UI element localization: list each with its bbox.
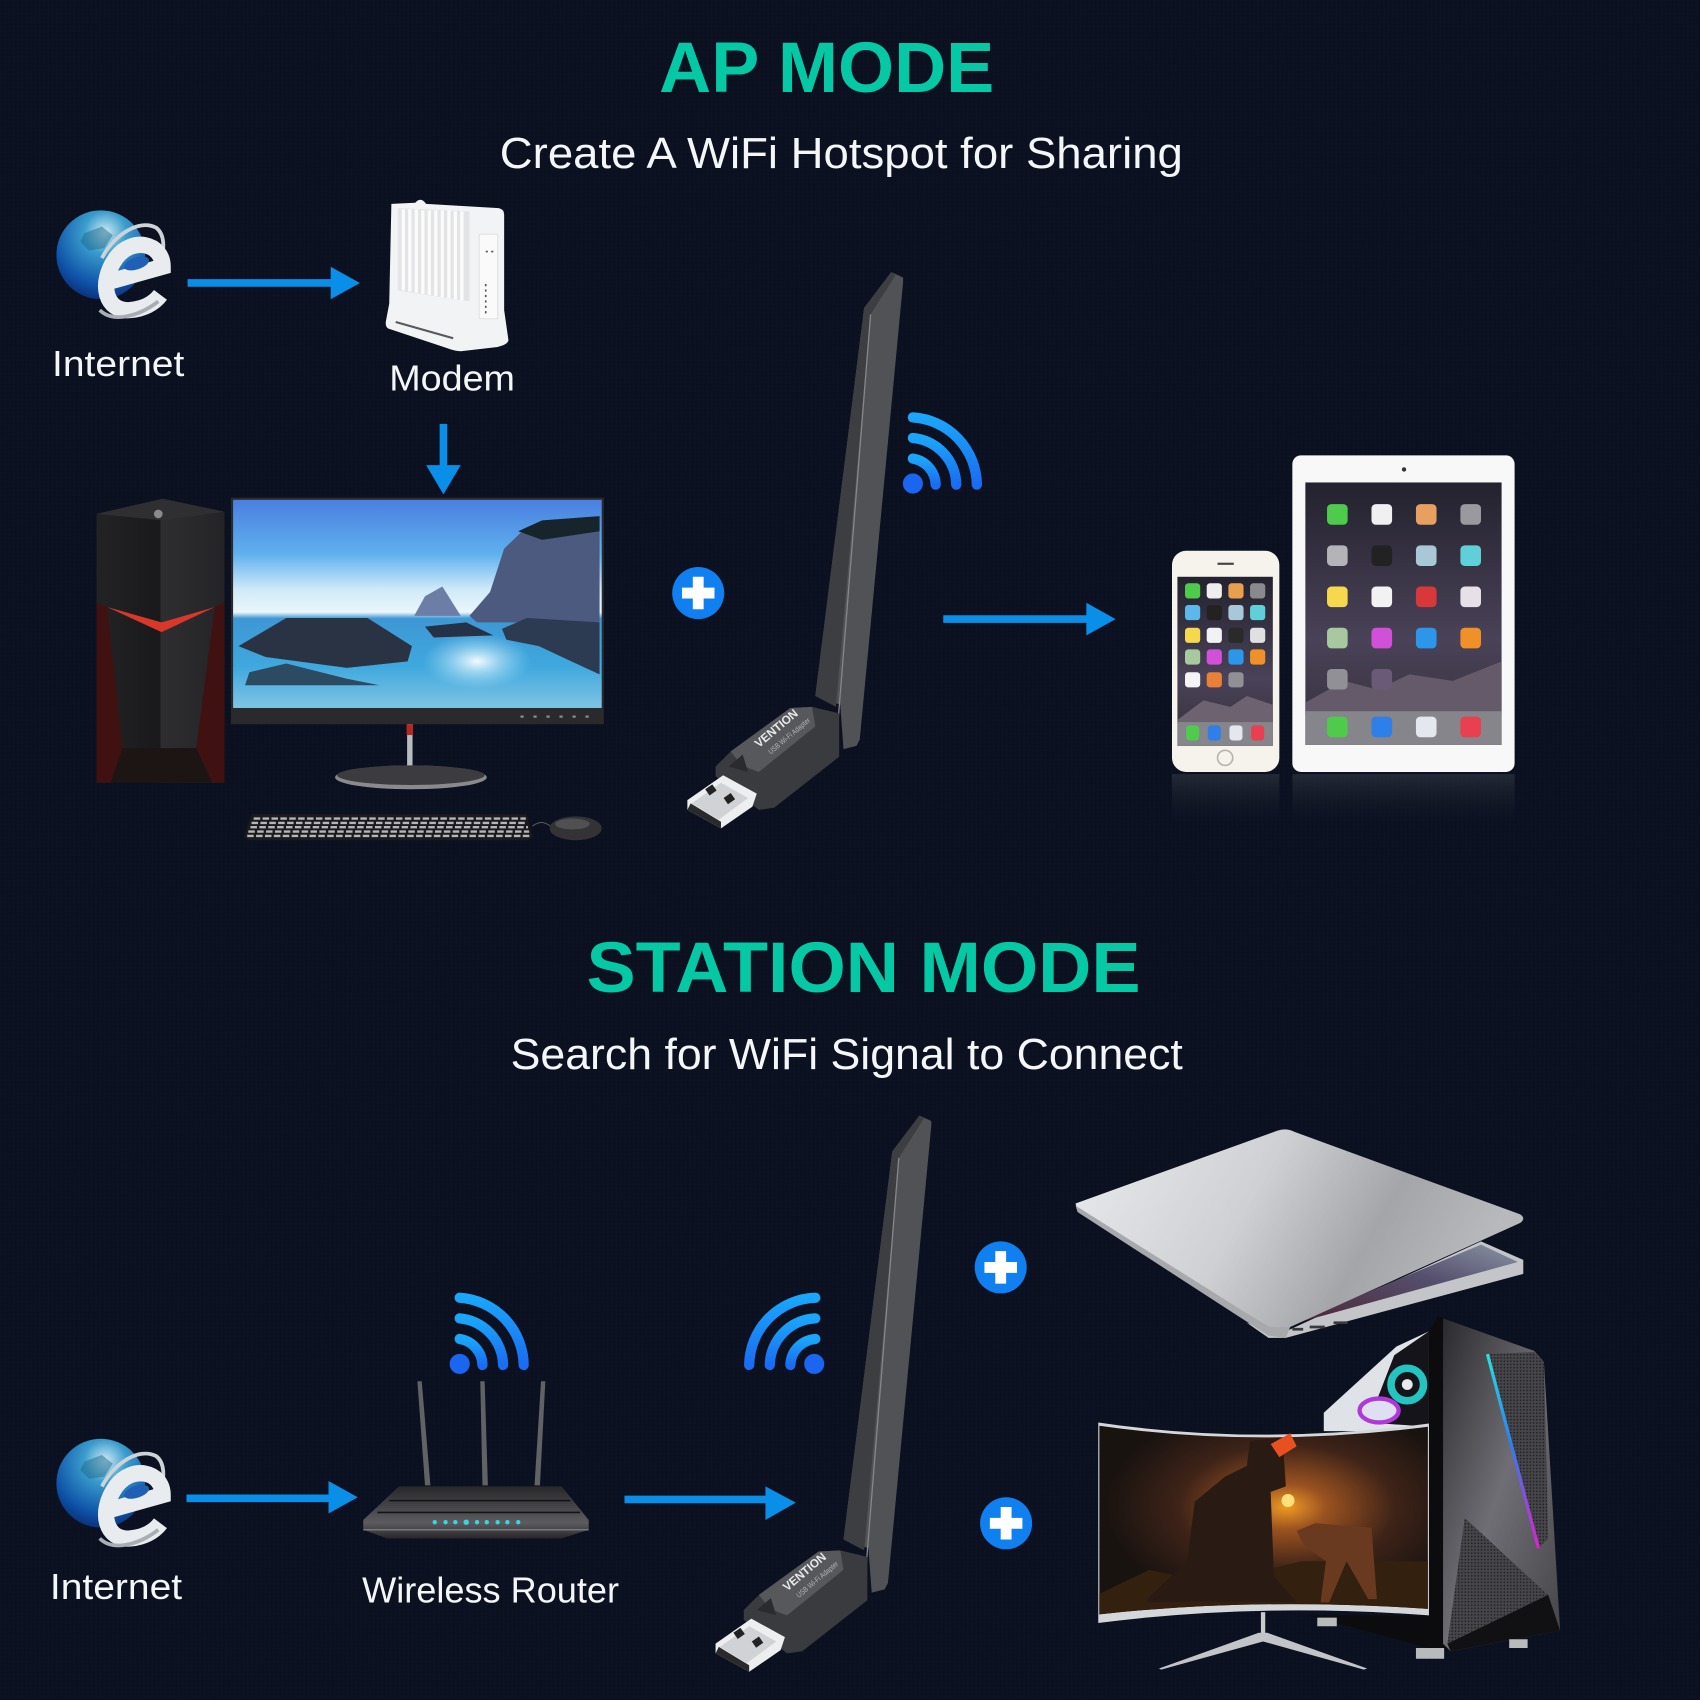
label: internet: Internet bbox=[50, 1567, 182, 1607]
rgb strip bbox=[1488, 1354, 1538, 1548]
label: internet: Internet bbox=[52, 344, 184, 384]
brand text: VENTION bbox=[752, 706, 801, 750]
dongle body bbox=[744, 1550, 867, 1653]
arrow: adapter to devices bbox=[943, 603, 1116, 635]
icon: wifi signal to adapter bbox=[749, 1298, 819, 1369]
icon: plus bbox=[672, 567, 724, 619]
front strip bbox=[1308, 1316, 1451, 1651]
arrow: modem to monitor bbox=[426, 424, 461, 494]
icon: wifi signal from router bbox=[455, 1298, 524, 1369]
icon: wireless router bbox=[363, 1381, 589, 1538]
icon: USB WiFi adapter: USB Wi-Fi Adapter bbox=[766, 716, 812, 756]
arrow: router to adapter bbox=[624, 1486, 796, 1520]
icon: plus lower bbox=[980, 1497, 1032, 1549]
title: AP mode: AP MODE bbox=[659, 28, 994, 108]
brand text: VENTION bbox=[780, 1550, 829, 1594]
icon: plus upper bbox=[975, 1241, 1027, 1293]
icon: keyboard bbox=[244, 814, 532, 840]
arrow: internet to router bbox=[186, 1481, 358, 1514]
USB plug bbox=[716, 1619, 785, 1672]
panel: station mode bbox=[50, 928, 1560, 1672]
USB plug bbox=[687, 775, 757, 828]
icon: PC tower bbox=[96, 499, 224, 783]
label: modem: Modem bbox=[389, 358, 515, 398]
antenna bbox=[815, 272, 903, 749]
icon: monitor stand bbox=[335, 724, 487, 789]
reflections bbox=[1172, 774, 1515, 826]
panel: AP mode bbox=[52, 28, 1515, 840]
arrow: internet to modem bbox=[188, 267, 360, 299]
bottom mesh bbox=[1447, 1518, 1548, 1644]
icon: USB WiFi adapter bbox=[716, 1116, 931, 1672]
icon: mouse bbox=[532, 816, 602, 840]
icon: USB WiFi adapter: USB Wi-Fi Adapter bbox=[795, 1559, 840, 1600]
icon: modem bbox=[386, 200, 508, 351]
antenna bbox=[843, 1116, 931, 1593]
icon: internet globe bbox=[56, 210, 163, 317]
top mesh bbox=[1488, 1352, 1548, 1548]
side panel bbox=[1443, 1318, 1560, 1651]
icon: tablet bbox=[1292, 455, 1515, 772]
tablet app icons bbox=[1327, 504, 1481, 737]
label: wireless router: Wireless Router bbox=[362, 1570, 619, 1610]
subtitle: station mode: Search for WiFi Signal to Connect bbox=[511, 1031, 1183, 1079]
dongle body bbox=[716, 707, 839, 810]
icon: curved monitor bbox=[1098, 1422, 1429, 1670]
icon: internet globe bbox=[56, 1439, 163, 1545]
subtitle: AP mode: Create A WiFi Hotspot for Sharing bbox=[500, 130, 1183, 178]
router LEDs bbox=[433, 1519, 520, 1525]
icon: laptop bbox=[1076, 1129, 1523, 1338]
icon: monitor bbox=[231, 498, 604, 724]
side glass with fans bbox=[1324, 1331, 1429, 1431]
phone app icons bbox=[1185, 583, 1265, 740]
title: station mode: STATION MODE bbox=[587, 928, 1141, 1008]
icon: smartphone bbox=[1172, 551, 1279, 772]
feet bbox=[1317, 1618, 1528, 1659]
monitor scenery bbox=[239, 516, 600, 690]
icon: gaming PC tower bbox=[1308, 1316, 1560, 1659]
icon: USB WiFi adapter bbox=[687, 272, 903, 828]
icon: wifi signal bbox=[908, 417, 977, 488]
monitor artwork bbox=[1099, 1433, 1428, 1614]
